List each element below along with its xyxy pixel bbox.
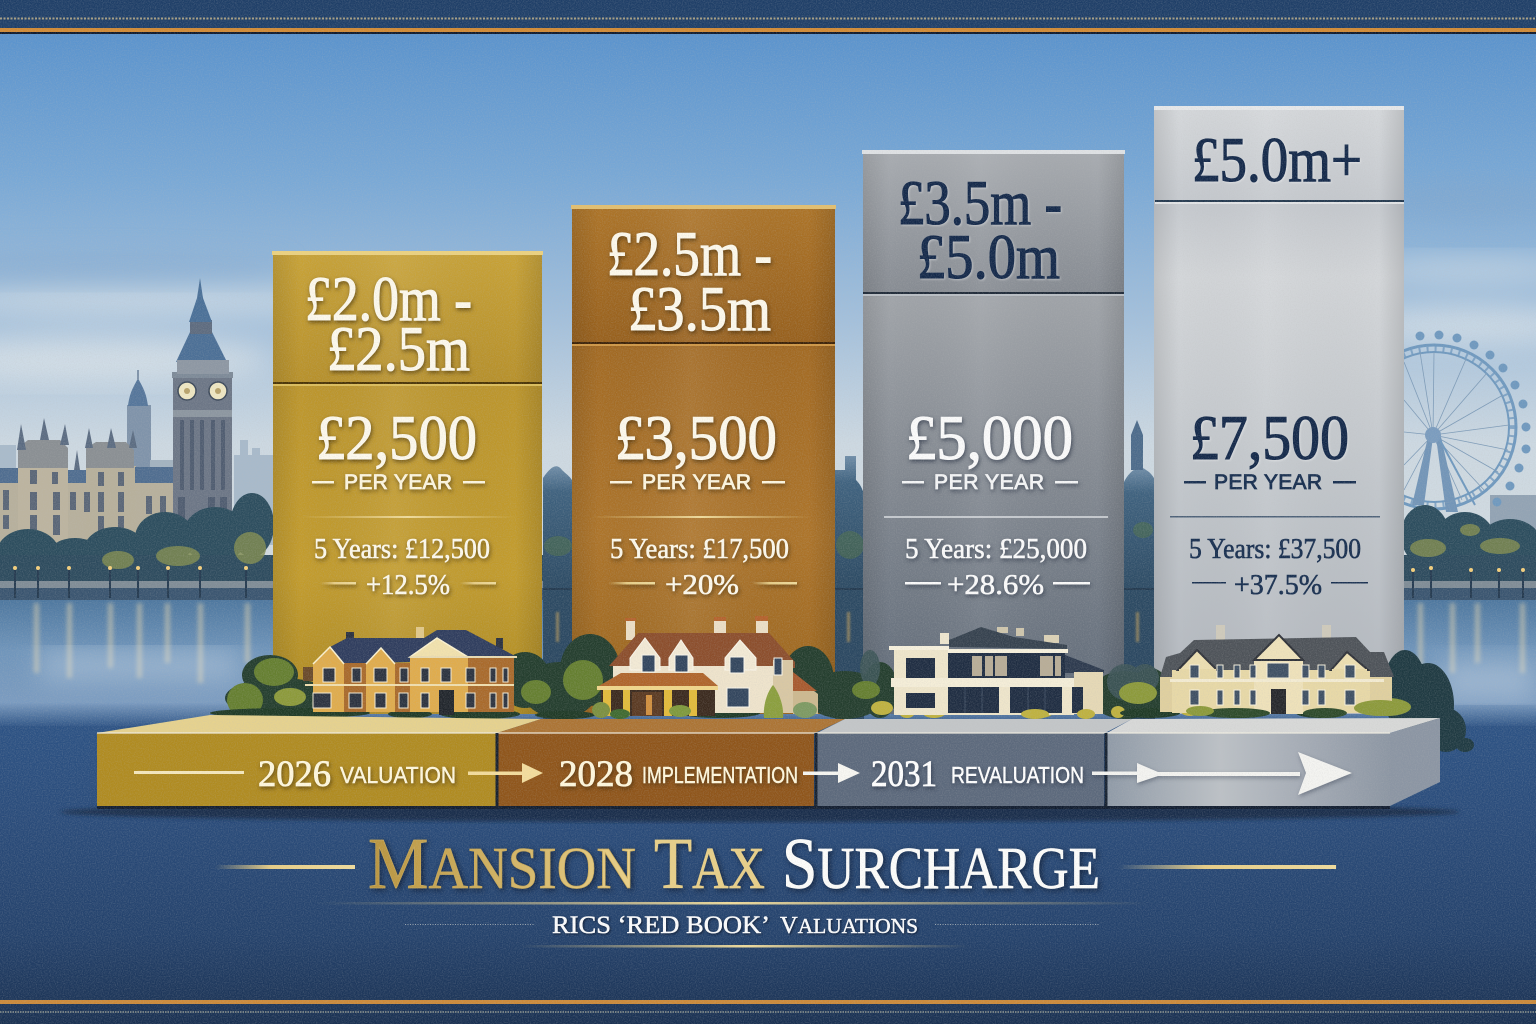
percentage: +28.6% — [947, 569, 1044, 601]
label: 2028 implementation — [559, 754, 798, 795]
range label: £2.5m - — [607, 219, 772, 289]
title: Mansion Tax Surcharge: TAX — [654, 823, 765, 904]
illustration: embankment wall with lamps — [0, 566, 1536, 600]
title: Mansion Tax Surcharge: MANSION — [368, 823, 636, 904]
range label: £5.0m — [917, 222, 1060, 292]
five-year total: 5 Years: £17,500 — [610, 533, 789, 565]
label: 2031 revaluation — [871, 754, 1084, 795]
segment: final silver with side face — [1107, 718, 1440, 807]
label: 2028 implementation: IMPLEMENTATION — [642, 762, 798, 788]
icon: house 4, grand country mansion — [1160, 625, 1406, 718]
arrow: future — [1092, 752, 1352, 795]
icon: house 3, modern white villa — [889, 627, 1104, 719]
panel: column 4, £5.0m+ silver — [1154, 106, 1404, 714]
range label: £5.0m+ — [1192, 125, 1362, 195]
label: 2026 valuation: VALUATION — [340, 762, 456, 788]
per year label: PER YEAR — [642, 471, 751, 494]
per year label: PER YEAR — [934, 471, 1044, 494]
panel: 3D timeline base — [97, 715, 1440, 809]
title: Mansion Tax Surcharge — [215, 823, 1336, 904]
title: Mansion Tax Surcharge: SURCHARGE — [782, 823, 1100, 904]
segment: 2026 gold — [97, 715, 541, 808]
range label: £2.0m - — [305, 264, 472, 334]
annual amount: £2,500 — [316, 403, 477, 473]
Big Ben tower — [172, 278, 233, 546]
background: navy lower panel — [0, 726, 1536, 1024]
label: 2026 valuation: 2026 — [258, 754, 331, 795]
percentage: +12.5% — [366, 569, 450, 601]
background: sky — [0, 34, 1536, 604]
panel: column 1, £2.0m–£2.5m gold — [272, 251, 543, 714]
annual amount: £7,500 — [1190, 403, 1349, 473]
annual amount: £3,500 — [615, 403, 777, 473]
panel: column 3, £3.5m–£5.0m steel — [862, 150, 1125, 714]
background: distant skyline haze — [0, 440, 1536, 545]
five-year total: 5 Years: £12,500 — [314, 533, 490, 565]
range label — [898, 168, 1062, 292]
five-year total: 5 Years: £25,000 — [905, 533, 1087, 565]
label: 2026 valuation — [258, 754, 456, 795]
five-year total: 5 Years: £37,500 — [1189, 533, 1361, 565]
label: 2028 implementation: 2028 — [559, 754, 633, 795]
Victoria tower — [127, 370, 175, 500]
subtitle: RICS Red Book valuations — [405, 912, 1100, 939]
annual amount: £5,000 — [906, 403, 1073, 473]
arrow: to 2028 — [468, 763, 543, 783]
label: 2031 revaluation: REVALUATION — [951, 762, 1084, 788]
per year label: PER YEAR — [1214, 471, 1322, 494]
range label: £3.5m — [628, 274, 771, 344]
parliament building — [0, 418, 200, 556]
shadow beneath timeline base — [60, 802, 1460, 822]
per year label: PER YEAR — [344, 471, 452, 494]
bottom border band — [0, 1000, 1536, 1012]
panel: column 2, £2.5m–£3.5m bronze — [571, 205, 836, 714]
segment: 2028 bronze — [497, 719, 845, 808]
gaps between columns: dark trees and river — [543, 420, 1155, 720]
subtitle: RICS Red Book valuations: VALUATIONS — [780, 913, 918, 939]
range label: £2.5m — [327, 314, 470, 384]
icon: house 1, gold brick manor — [303, 627, 517, 715]
range label — [305, 264, 472, 384]
illustration: tree line along the embankment — [0, 493, 1536, 583]
top border band — [0, 0, 1536, 34]
percentage: +37.5% — [1234, 569, 1322, 601]
segment: 2031 slate — [817, 719, 1132, 808]
icon: house 2, cream cottage — [592, 616, 818, 719]
percentage: +20% — [665, 569, 739, 601]
range label — [607, 219, 772, 344]
range label: £3.5m - — [898, 168, 1062, 238]
illustration: London Eye — [1352, 330, 1530, 512]
label: 2031 revaluation: 2031 — [871, 754, 937, 795]
arrow: timeline start — [134, 771, 244, 774]
illustration: shrubs and trees behind houses — [210, 634, 1474, 752]
subtitle: RICS Red Book valuations: RICS ‘RED BOOK’ — [552, 912, 770, 939]
arrow: to 2031 — [803, 763, 860, 783]
illustration: Houses of Parliament and Big Ben — [0, 278, 233, 556]
background: river Thames — [0, 600, 1536, 728]
